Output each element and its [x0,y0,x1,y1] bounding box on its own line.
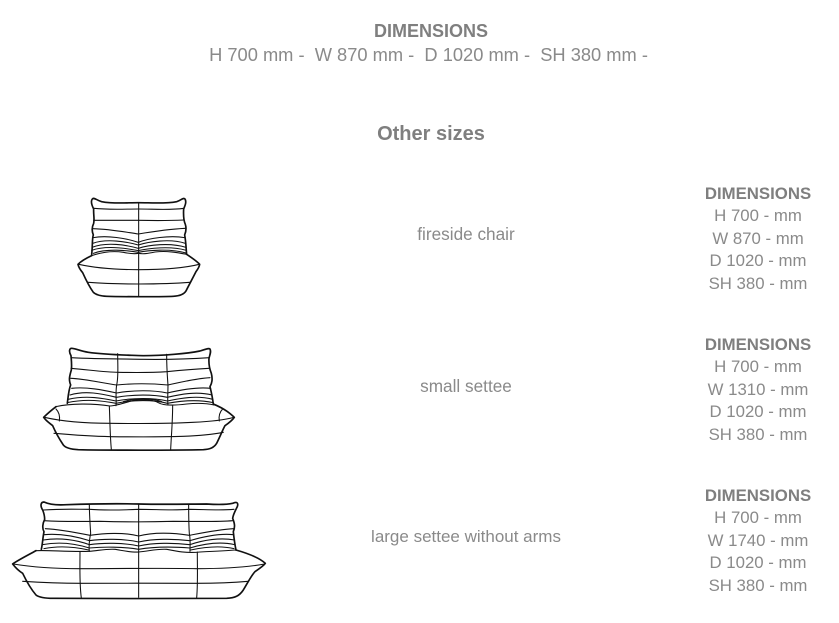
other sizes heading: Other sizes [377,123,485,145]
main dimensions values: H 700 mm - W 870 mm - D 1020 mm - SH 380 mm - [209,44,648,65]
main dimensions heading: DIMENSIONS [374,21,488,41]
dimensions: small settee: DIMENSIONS H 700 - mm W 1310 - mm D 1020 - mm SH 380 - mm [705,335,811,444]
label: large settee without arms: large settee without arms [371,527,561,546]
dimensions: large settee without arms: DIMENSIONS H 700 - mm W 1740 - mm D 1020 - mm SH 380 - mm [705,486,811,595]
dimensions: fireside chair: DIMENSIONS H 700 - mm W 870 - mm D 1020 - mm SH 380 - mm [705,184,811,293]
label: fireside chair: fireside chair [417,224,515,244]
label: small settee: small settee [420,376,512,396]
